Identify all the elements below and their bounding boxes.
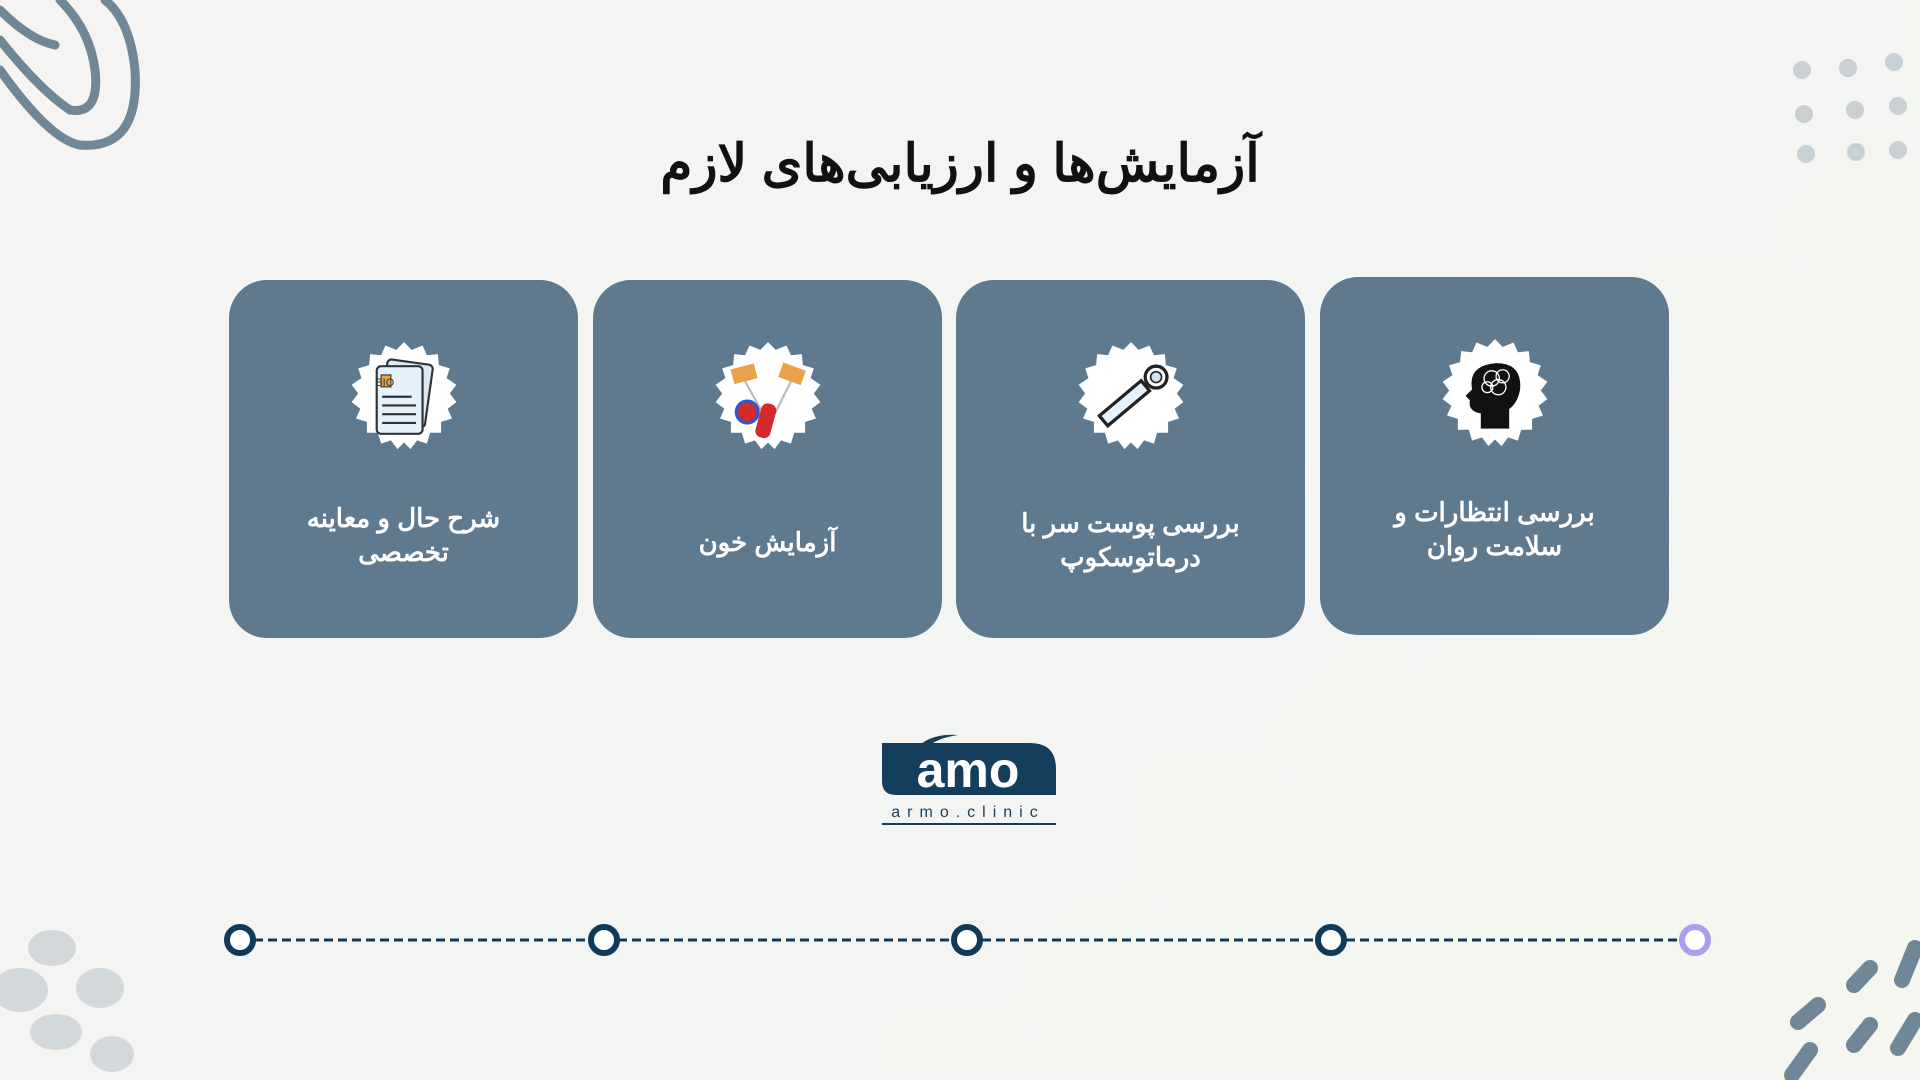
panel: blood test [593, 280, 942, 638]
icon: head with brain [1442, 339, 1548, 446]
decoration: bottom-left blobs [0, 930, 134, 1072]
text [1392, 497, 1595, 562]
icon: bio document: BIO [375, 377, 394, 389]
panel: expectations and mental health [1320, 277, 1669, 635]
decoration: top-left swirl [0, 0, 140, 150]
logo: armo clinic: amo [917, 742, 1019, 798]
text [1021, 508, 1240, 573]
text: بررسی پوست سر با [1021, 508, 1240, 538]
timeline [224, 924, 1711, 956]
icon: blood tubes [716, 342, 820, 449]
decoration: bottom-right dashes [1784, 940, 1920, 1080]
title: آزمایش‌ها و ارزیابی‌های لازم [660, 135, 1260, 193]
icon: dermatoscope [1078, 342, 1184, 449]
text: آزمایش خون [699, 527, 836, 557]
logo: armo clinic [882, 734, 1056, 825]
text [307, 503, 500, 567]
logo: armo clinic: armo.clinic [891, 804, 1045, 821]
text: شرح حال و معاینه [307, 503, 500, 533]
text: بررسی انتظارات و [1394, 497, 1595, 527]
panel: history and exam [229, 280, 578, 638]
icon: bio document [352, 342, 456, 449]
text: سلامت روان [1427, 531, 1562, 561]
panel: dermatoscope [956, 280, 1305, 638]
text: درماتوسکوپ [1060, 542, 1201, 572]
text: تخصصی [358, 537, 449, 567]
decoration: top-right dots [1793, 53, 1907, 163]
